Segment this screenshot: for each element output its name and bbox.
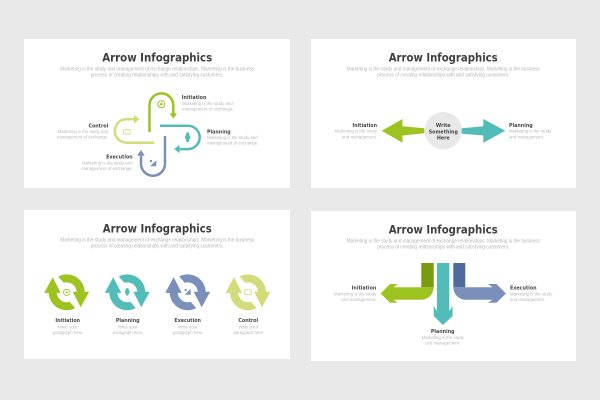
label: initiation: paragraph here [53, 330, 83, 335]
title: Arrow Infographics [102, 51, 212, 65]
icon: watch [185, 132, 190, 142]
center circle: Something [429, 129, 458, 135]
label: initiation: Marketing is the study [335, 129, 378, 134]
label: execution: Write your [178, 324, 198, 329]
label: control: Marketing is the study and [58, 129, 109, 134]
panel: three branching arrows [311, 211, 576, 361]
subtitle [60, 237, 255, 249]
label: planning [422, 329, 465, 346]
label: execution: and management. [510, 297, 545, 302]
label: initiation: and management. [342, 134, 377, 139]
arrow: planning [160, 126, 200, 153]
arrow: right teal [462, 119, 505, 143]
cycle: planning [105, 274, 150, 310]
arrow: control [115, 115, 154, 143]
label: planning: Marketing is the study and [207, 135, 258, 140]
label: initiation: and management. [341, 297, 376, 302]
label: initiation [335, 123, 378, 139]
cycle: control [226, 274, 270, 310]
icon: target [158, 101, 165, 108]
label: control [233, 318, 264, 335]
panel: two opposing arrows [311, 39, 576, 188]
label: initiation [53, 318, 83, 335]
label: planning: management of exchange. [207, 141, 258, 146]
label: initiation: Marketing is the study and [182, 101, 233, 106]
cycle: execution [165, 274, 210, 310]
subtitle: process of creating relationships with and satisfying customers. [91, 73, 224, 79]
label: planning: Marketing is the study [422, 335, 465, 340]
label: planning: and management. [425, 341, 460, 346]
label: planning: and management. [509, 134, 544, 139]
label: initiation: Initiation [352, 286, 377, 292]
label: execution [173, 318, 203, 335]
label: initiation: Initiation [182, 95, 207, 101]
subtitle: process of creating relationships with and satisfying customers. [377, 244, 509, 250]
subtitle [60, 67, 255, 79]
panel: cross of curved arrows [24, 39, 290, 188]
label: planning [113, 318, 143, 335]
label: control: Control [88, 123, 109, 129]
label: control: Control [238, 318, 259, 324]
label: control: Write your [238, 324, 259, 329]
title: Arrow Infographics [103, 222, 212, 236]
label: execution: management of exchange. [81, 166, 133, 171]
label: execution [81, 155, 133, 171]
label: control: management of exchange. [57, 135, 108, 140]
cycle: initiation [44, 274, 89, 310]
label: planning: Planning [431, 329, 455, 335]
label: execution: Execution [174, 318, 202, 324]
arrow: left green [382, 119, 424, 143]
subtitle: Marketing is the study and management of exchange relationships. Marketing is the business [60, 237, 255, 243]
title: Arrow Infographics [389, 222, 498, 236]
arrow: right blue [453, 263, 506, 303]
label: initiation: Write your [58, 324, 78, 329]
arrow: initiation [150, 93, 177, 132]
icon: laptop [124, 130, 130, 134]
center circle: Write [436, 123, 451, 129]
label: planning: Planning [509, 123, 533, 129]
label: initiation: management of exchange. [182, 106, 233, 112]
panel background [311, 211, 576, 361]
panel background [24, 39, 290, 188]
label: planning [509, 123, 552, 139]
subtitle: Marketing is the study and management of exchange relationships. Marketing is the business [347, 67, 540, 73]
subtitle [347, 238, 540, 250]
subtitle: process of creating relationships with and satisfying customers. [91, 243, 224, 249]
label: initiation: Initiation [352, 123, 378, 129]
panel background [24, 210, 290, 359]
arrow: down teal [434, 263, 453, 325]
subtitle: Marketing is the study and management of exchange relationships. Marketing is the business [60, 67, 255, 73]
label: execution: paragraph here [173, 330, 203, 335]
label: control [57, 123, 109, 140]
label: control: paragraph here [233, 330, 264, 335]
center circle: Here [437, 135, 450, 141]
label: planning: Planning [116, 318, 140, 324]
label: execution: Execution [510, 286, 537, 292]
center circle [425, 112, 462, 149]
panel: circular arrows [24, 210, 290, 359]
title: Arrow Infographics [389, 51, 498, 65]
label: planning: Planning [207, 129, 231, 135]
label: planning: Write your [118, 324, 138, 329]
label: planning [207, 129, 258, 146]
label: initiation [182, 95, 233, 112]
arrow: execution [137, 136, 165, 176]
label: execution [510, 286, 553, 302]
label: planning: Marketing is the study [509, 129, 552, 134]
panel background [311, 39, 576, 188]
label: planning: paragraph here [113, 330, 143, 335]
subtitle: process of creating relationships with and satisfying customers. [377, 73, 509, 79]
label: initiation [334, 286, 377, 302]
subtitle: Marketing is the study and management of exchange relationships. Marketing is the business [347, 238, 540, 244]
label: execution: Marketing is the study [510, 292, 553, 297]
label: execution: Marketing is the study and [82, 160, 133, 165]
label: initiation: Marketing is the study [334, 292, 377, 297]
icon: chart [150, 160, 156, 166]
subtitle [347, 67, 540, 79]
arrow: left green [381, 263, 434, 303]
label: execution: Execution [106, 155, 133, 161]
label: initiation: Initiation [55, 318, 81, 324]
